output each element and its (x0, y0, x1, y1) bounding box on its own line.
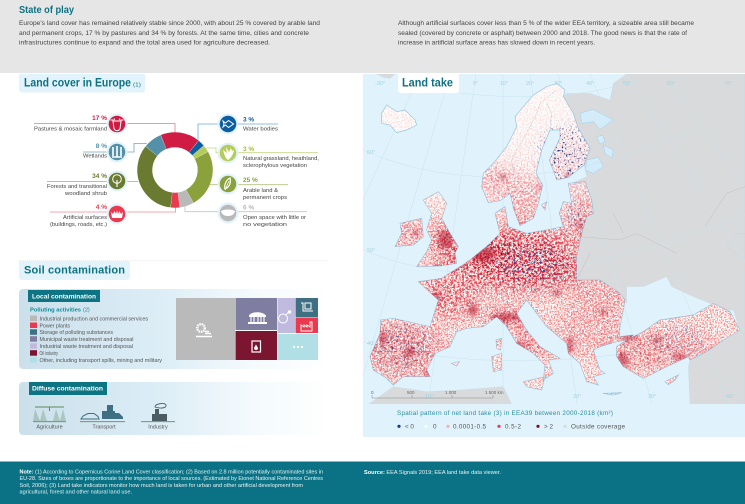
notes: EU-28. Sizes of boxes are proportionate to the importance of local sources. (Estimated by Eionet National Reference Centres (20, 476, 323, 482)
category: arable land: permanent crops (243, 195, 287, 201)
map legend: 0 (433, 424, 437, 430)
source: Source: EEA Signals 2019; EEA land take data viewer. (364, 470, 501, 476)
icon: other dots (293, 346, 303, 348)
category: arable land: 25 % (243, 177, 258, 184)
category: water bodies: 3 % (243, 116, 254, 124)
graticule labels: 10° (500, 81, 508, 87)
icon: oil can (252, 341, 260, 352)
inland seas and lakes (580, 109, 613, 173)
graticule labels: 50° (623, 81, 631, 87)
land take speckle (363, 74, 745, 404)
category: arable land (218, 174, 287, 201)
icon: municipal building (248, 312, 267, 324)
map legend: < 0 (405, 424, 414, 430)
category: pastures (34, 114, 128, 134)
urban hot spots (380, 173, 687, 376)
scale bar: 1 500 km (485, 390, 504, 395)
notes: agricultural, forest and other natural land use. (20, 490, 132, 496)
notes: Note: (1) According to Copernicus Corine Land Cover classification; (2) Based on 2.8 million potentially contaminated sites in (20, 470, 323, 476)
category: pastures: 17 % (92, 115, 107, 122)
graticule (355, 74, 745, 404)
category: wetlands: Wetlands (83, 154, 107, 160)
category: artificial surfaces: Artificial surfaces (63, 215, 107, 221)
text block: right column: sealed (covered by concrete or asphalt) between 2000 and 2018. The good news is that the rate of (398, 30, 687, 37)
tab: diffuse contamination: Diffuse contamination (32, 386, 103, 392)
legend: polluting activities: Oil industry (40, 351, 58, 357)
legend: polluting activities: Polluting activities (30, 308, 81, 314)
tab: local contamination (28, 290, 100, 302)
category: open space (218, 202, 306, 228)
category: open space: no vegetation (243, 222, 287, 228)
icon: transport (80, 405, 125, 430)
category: water bodies (218, 114, 278, 134)
donut chart (132, 127, 218, 213)
legend: polluting activities: (2) (83, 308, 90, 314)
land areas (370, 83, 740, 395)
footer (0, 462, 745, 504)
notes (20, 470, 323, 496)
text block: left column: Europe's land cover has remained relatively stable since 2000, with about 25 % covered by arable land (19, 20, 320, 27)
category: wetlands: 8 % (96, 143, 107, 150)
map legend: > 2 (544, 424, 553, 430)
scale bar (371, 390, 504, 398)
panel: land take map (355, 74, 745, 437)
graticule labels: 30° (554, 81, 562, 87)
panel: soil contamination (19, 260, 329, 435)
heading: state of play: State of play (19, 5, 74, 16)
legend: polluting activities: Industrial production and commercial services (40, 316, 148, 322)
legend: polluting activities: Storage of polluting substances (40, 330, 113, 336)
sub-panel: diffuse contamination (19, 382, 329, 435)
category: natural grassland: 3 % (243, 146, 254, 153)
map legend: Outside coverage (571, 424, 625, 430)
connector lines (34, 124, 318, 212)
graticule labels: 70° (724, 81, 732, 87)
heading: land cover: Land cover in Europe (24, 78, 131, 90)
category: artificial surfaces (50, 204, 128, 228)
category: arable land: Arable land & (243, 188, 278, 194)
category: forests: 34 % (92, 173, 107, 180)
graticule labels: 20° (526, 81, 534, 87)
sub-panel: local contamination (19, 289, 329, 369)
category: natural grassland: Natural grassland, heathland, (243, 156, 319, 162)
heading: soil contamination (19, 261, 130, 280)
icon: storage (301, 303, 313, 311)
graticule labels: 60° (367, 150, 375, 156)
text block: left column (19, 20, 320, 46)
map (355, 74, 745, 404)
graticule labels: 30° (648, 394, 656, 400)
graticule labels (367, 81, 734, 400)
scale bar: 0 (371, 390, 374, 395)
icon: industry gear (196, 324, 212, 336)
heading: soil contamination: Soil contamination (24, 264, 125, 276)
category: artificial surfaces: 4 % (96, 204, 107, 211)
map legend: Spatial pattern of net land take (3) in EEA39 between 2000-2018 (km²) (397, 410, 613, 417)
text block: right column: increase in artificial surface areas has slowed down in recent years. (398, 40, 595, 46)
scale bar: 1 000 (445, 390, 457, 395)
graticule labels: 60° (667, 81, 675, 87)
graticule labels: 50° (367, 248, 375, 254)
heading: land take (398, 74, 459, 93)
tab: local contamination: Local contamination (32, 294, 96, 300)
legend: polluting activities: Industrial waste treatment and disposal (40, 344, 133, 350)
outside coverage areas (368, 74, 745, 404)
legend: polluting activities: Municipal waste treatment and disposal (40, 337, 134, 343)
map legend: 0.5-2 (505, 424, 521, 430)
map legend (397, 410, 625, 430)
legend: polluting activities (30, 308, 162, 364)
graticule labels: 10° (425, 394, 433, 400)
category: pastures: Pastures & mosaic farmland (34, 126, 107, 132)
icon: transport: Transport (92, 424, 116, 430)
icon: industry: Industry (148, 424, 168, 430)
category: natural grassland: sclerophylous vegetation (243, 163, 307, 169)
heading: land take: Land take (402, 78, 453, 90)
legend: polluting activities: Other, including transport spills, mining and military (40, 358, 162, 364)
category: artificial surfaces: (buildings, roads, etc.) (50, 222, 107, 228)
category: forests: woodland shrub (64, 191, 107, 197)
text block: right column (398, 20, 694, 46)
text block: left column: infrastructures continue to expand and the total area used for agriculture decreased. (19, 40, 270, 46)
tab: diffuse contamination (29, 382, 107, 395)
category: water bodies: Water bodies (243, 127, 278, 133)
map legend: 0.0001-0.5 (453, 424, 486, 430)
icon: agriculture: Agriculture (36, 424, 63, 430)
graticule labels: 20° (573, 394, 581, 400)
category: forests (47, 170, 128, 197)
icon: factory (301, 322, 312, 331)
graticule labels: 0° (473, 81, 478, 87)
category: open space: Open space with little or (243, 215, 306, 221)
category: natural grassland (218, 142, 319, 169)
text block: left column: and permanent crops, 17 % by pastures and 34 % by forests. At the same time, cities and concrete (19, 30, 309, 37)
legend: polluting activities: Power plants (40, 323, 70, 329)
graticule labels: 40° (726, 394, 734, 400)
heading: land cover (19, 74, 145, 92)
category: wetlands (83, 142, 128, 162)
icon: agriculture (33, 407, 66, 430)
panel: state of play header (0, 0, 745, 73)
notes: Soil, 2006); (3) Land take indicators monitor how much land is taken for urban and other artificial development from (20, 483, 304, 489)
graticule labels: -30° (375, 81, 385, 87)
graticule labels: 40° (367, 341, 375, 347)
icon: bomb (278, 311, 291, 323)
category: open space: 6 % (243, 204, 254, 212)
graticule labels: 40° (586, 81, 594, 87)
country borders (480, 90, 745, 347)
panel: land cover in Europe (19, 74, 319, 228)
text block: right column: Although artificial surfaces cover less than 5 % of the wider EEA territory, a sizeable area still became (398, 20, 694, 27)
heading: land cover: (1) (133, 82, 141, 88)
treemap (176, 298, 318, 360)
scale bar: 500 (407, 390, 415, 395)
category: forests: Forests and transitional (47, 184, 107, 190)
icon: industry (141, 404, 175, 430)
